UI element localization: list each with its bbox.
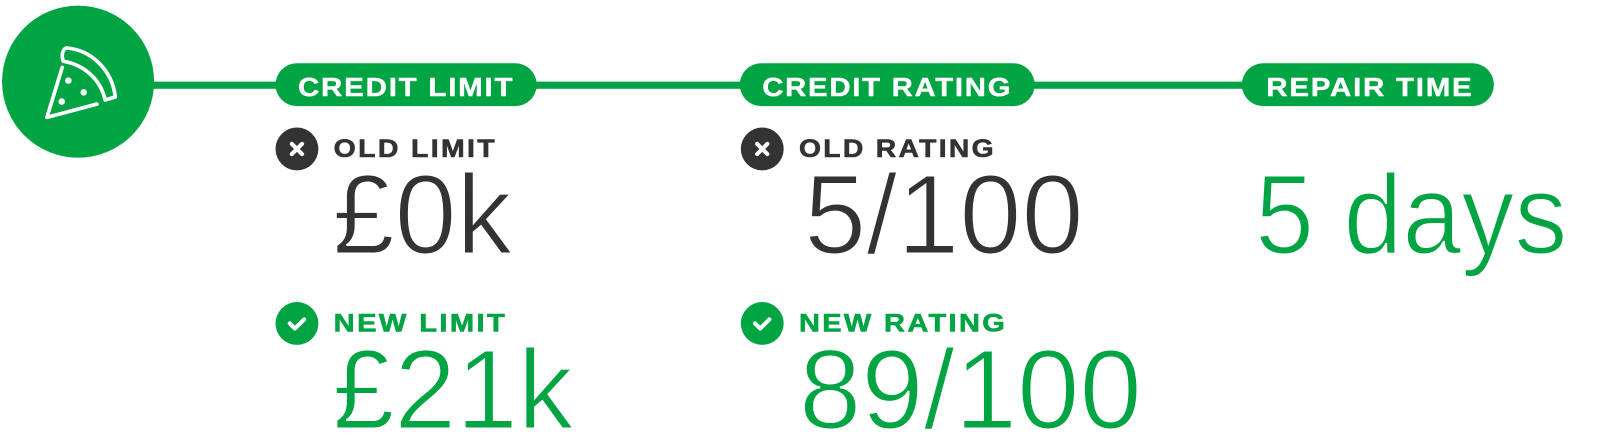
new limit label with check icon <box>276 302 507 345</box>
heading pill: repair time: REPAIR TIME <box>1266 72 1473 102</box>
old rating label with cross icon <box>741 128 996 170</box>
old limit label with cross icon <box>276 128 497 170</box>
heading pill: credit limit: CREDIT LIMIT <box>298 72 514 102</box>
connector line <box>148 82 1250 89</box>
heading pill: credit limit <box>276 63 537 106</box>
heading pill: credit rating: CREDIT RATING <box>762 72 1012 102</box>
repair time value: 5 days <box>1255 152 1567 279</box>
heading pill: credit rating <box>740 63 1035 106</box>
new rating label with check icon <box>741 302 1007 345</box>
heading pill: repair time <box>1242 63 1494 106</box>
old limit label with cross icon: OLD LIMIT <box>334 135 497 163</box>
icon: pizza slice in green circle <box>2 6 154 158</box>
old rating label with cross icon: OLD RATING <box>799 135 996 163</box>
new rating label with check icon: NEW RATING <box>799 310 1007 338</box>
old rating value: 5/100 <box>804 152 1084 279</box>
old limit value: £0k <box>333 152 513 279</box>
new limit label with check icon: NEW LIMIT <box>334 310 507 338</box>
